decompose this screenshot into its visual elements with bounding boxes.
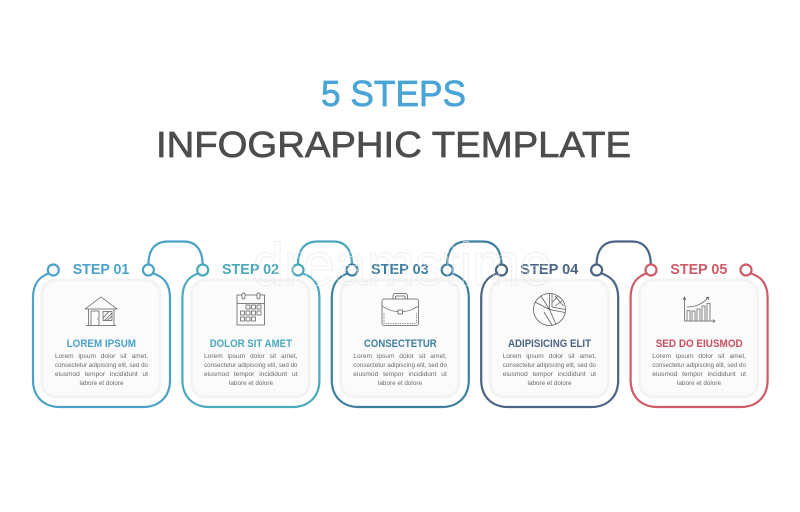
heading: DOLOR SIT AMET xyxy=(210,338,292,350)
icon: calendar xyxy=(237,293,264,325)
body text: labore et dolore xyxy=(229,380,273,387)
body text: Lorem ipsum dolor sit amet, xyxy=(503,353,596,360)
heading: ADIPISICING ELIT xyxy=(508,338,591,350)
panel: step 05 xyxy=(631,261,768,407)
body text: Lorem ipsum dolor sit amet, xyxy=(55,353,148,360)
panel: step 04 xyxy=(481,261,618,407)
body text: consectetur adipiscing elit, sed do xyxy=(55,362,148,369)
step label: STEP 02 xyxy=(222,261,279,278)
panel: step 03 xyxy=(332,261,469,407)
body text: labore et dolore xyxy=(677,380,721,387)
connector arrow: step 2 to step 3 xyxy=(298,242,352,265)
connector arrow: step 3 to step 4 xyxy=(447,242,501,265)
body text: labore et dolore xyxy=(528,380,572,387)
step label: STEP 05 xyxy=(670,261,727,278)
body text: eiusmod tempor incididunt ut xyxy=(204,371,298,378)
step label: STEP 04 xyxy=(520,261,579,278)
body text xyxy=(503,353,596,387)
panel: step 01 xyxy=(33,261,170,407)
body text: eiusmod tempor incididunt ut xyxy=(652,371,746,378)
connector arrow: step 4 to step 5 xyxy=(597,242,651,265)
heading: CONSECTETUR xyxy=(364,338,437,350)
icon: house xyxy=(85,297,117,326)
body text: labore et dolore xyxy=(80,380,124,387)
panel: step 02 xyxy=(182,261,319,407)
body text xyxy=(353,353,447,387)
heading: LOREM IPSUM xyxy=(67,338,136,350)
connector arrow: step 1 to step 2 xyxy=(148,242,203,265)
heading: SED DO EIUSMOD xyxy=(656,338,743,350)
body text xyxy=(55,353,148,387)
body text: consectetur adipiscing elit, sed do xyxy=(503,362,596,369)
body text: consectetur adipiscing elit, sed do xyxy=(204,362,298,369)
body text: consectetur adipiscing elit, sed do xyxy=(353,362,447,369)
icon: bar chart with rising arrow xyxy=(683,297,715,322)
body text: consectetur adipiscing elit, sed do xyxy=(652,362,746,369)
step label: STEP 03 xyxy=(371,261,429,278)
body text xyxy=(204,353,298,387)
body text: Lorem ipsum dolor sit amet, xyxy=(652,353,746,360)
icon: briefcase xyxy=(382,294,418,326)
body text: labore et dolore xyxy=(378,380,422,387)
body text xyxy=(652,353,746,387)
body text: Lorem ipsum dolor sit amet, xyxy=(353,353,447,360)
body text: eiusmod tempor incididunt ut xyxy=(55,371,148,378)
icon: pie chart xyxy=(534,294,566,326)
body text: Lorem ipsum dolor sit amet, xyxy=(204,353,298,360)
body text: eiusmod tempor incididunt ut xyxy=(503,371,596,378)
watermark: dreamstime xyxy=(252,231,552,298)
title: 5 steps: 5 STEPS xyxy=(321,73,466,114)
title: infographic template: INFOGRAPHIC TEMPLATE xyxy=(156,124,631,165)
step label: STEP 01 xyxy=(73,261,129,278)
body text: eiusmod tempor incididunt ut xyxy=(353,371,447,378)
